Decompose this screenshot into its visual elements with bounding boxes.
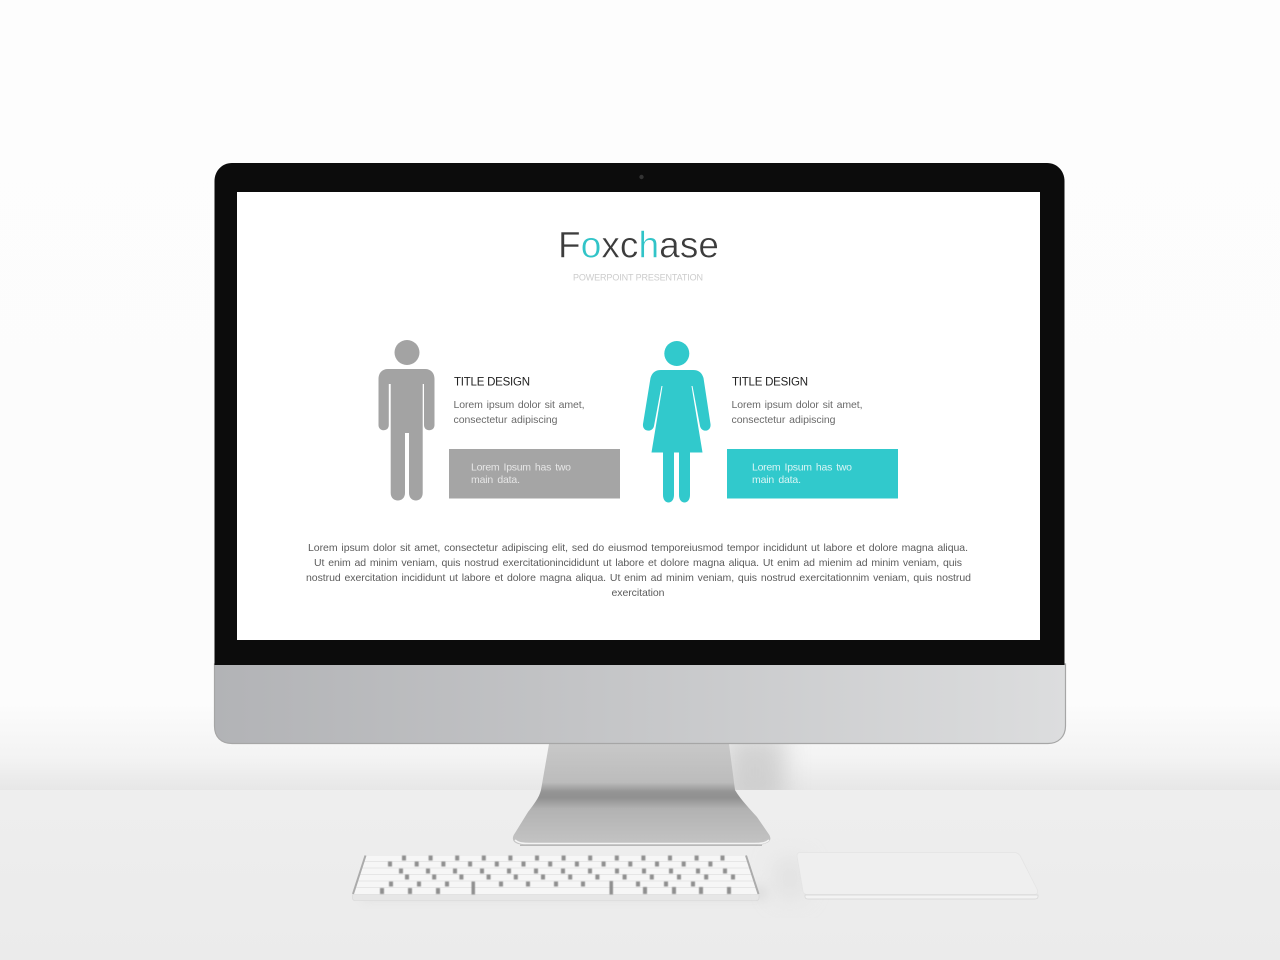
data box text: main data. [752, 474, 801, 486]
trackpad surface [797, 852, 1038, 894]
desk surface [0, 790, 1280, 960]
body paragraph: nostrud exercitation incididunt ut labore et dolore magna aliqua. Ut enim ad minim veniam, quis nostrud exercitationnim veniam, quis nostrud [306, 572, 971, 584]
body paragraph: exercitation [612, 587, 665, 599]
title: Foxchase: Foxchase [558, 224, 719, 266]
webcam [639, 175, 644, 179]
keyboard key field [353, 856, 758, 895]
stand body [513, 744, 770, 845]
monitor [214, 163, 1066, 744]
icon: woman [643, 341, 711, 502]
keyboard front edge [352, 894, 759, 900]
heading: TITLE DESIGN [732, 376, 808, 388]
data box text: main data. [471, 474, 520, 486]
panel: female [643, 341, 898, 502]
description: Lorem ipsum dolor sit amet, [732, 399, 862, 411]
panel: male [378, 340, 620, 500]
stand foot highlight [515, 840, 769, 844]
body paragraph: Ut enim ad minim veniam, quis nostrud exercitationincididunt ut labore et dolore magna aliqua. Ut enim ad mienim ad minim veniam, quis [314, 557, 962, 569]
description: consectetur adipiscing [454, 414, 558, 426]
keyboard [352, 856, 767, 900]
trackpad [775, 852, 1038, 899]
keyboard side edges [353, 856, 758, 894]
stand foot edge [520, 844, 762, 846]
trackpad shadow [775, 858, 805, 898]
description: Lorem ipsum dolor sit amet, [454, 399, 584, 411]
keyboard shadow [362, 886, 767, 900]
data box [727, 449, 898, 498]
data box text: Lorem Ipsum has two [752, 462, 852, 474]
monitor bezel [214, 163, 1064, 665]
icon: man [378, 340, 434, 500]
monitor stand [513, 744, 770, 845]
slide title [558, 224, 719, 282]
data box text: Lorem Ipsum has two [471, 462, 571, 474]
subtitle: POWERPOINT PRESENTATION [573, 272, 703, 282]
data box [449, 449, 620, 498]
keyboard row lines [355, 862, 756, 888]
description: consectetur adipiscing [732, 414, 836, 426]
monitor chin [214, 664, 1066, 744]
wall shadow beside stand [729, 744, 794, 790]
heading: TITLE DESIGN [454, 376, 530, 388]
trackpad front edge [805, 895, 1038, 899]
screen [237, 192, 1040, 640]
body paragraph: Lorem ipsum dolor sit amet, consectetur adipiscing elit, sed do eiusmod temporeiusmod tempor incididunt ut labore et dolore magna aliqua. [308, 542, 968, 554]
keyboard key gaps [380, 856, 735, 894]
